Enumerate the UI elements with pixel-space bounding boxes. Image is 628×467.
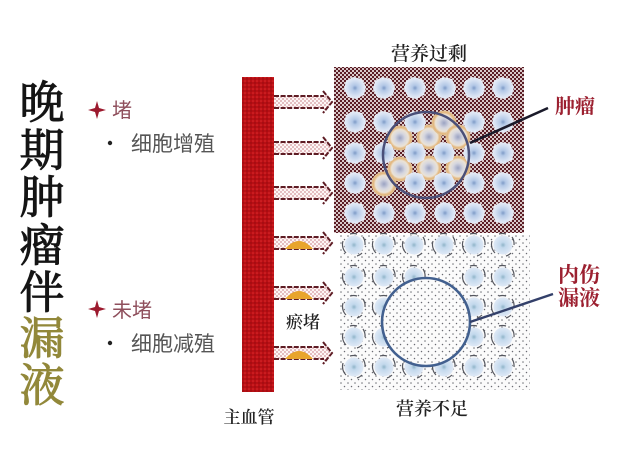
title highlighted part: 漏液: 液 <box>19 361 65 411</box>
title highlighted part: 漏液 <box>19 314 65 411</box>
panel: insufficient nutrition tissue <box>340 233 530 390</box>
callout label: 内伤漏液: 内伤 <box>558 263 600 287</box>
title highlighted part: 漏液: 漏 <box>19 314 65 364</box>
title dark part: 期 <box>19 126 65 176</box>
title dark part: 晚 <box>19 78 65 128</box>
callout label: 内伤漏液: 漏液 <box>558 286 600 310</box>
tumour boundary circle <box>383 112 469 198</box>
label: 营养不足: 营养不足 <box>396 399 468 419</box>
normal cells <box>344 77 514 224</box>
label: 主血管: 主血管 <box>224 408 274 427</box>
callout line: internal injury leakage <box>470 294 553 322</box>
arrows from vessel to tissue <box>274 91 332 364</box>
bullet group: 未堵 <box>88 299 215 356</box>
heading: 未堵: 未堵 <box>112 299 152 322</box>
blockages in arrows <box>285 241 313 359</box>
sub bullet: 细胞减殖: 细胞减殖 <box>131 333 215 356</box>
tumour cells with orange rim <box>372 110 470 196</box>
title dark part: 肿 <box>19 173 65 223</box>
callout line: tumour <box>470 108 548 143</box>
label: 营养过剩: 营养过剩 <box>391 43 467 65</box>
sub bullet: 细胞增殖: 细胞增殖 <box>131 133 215 156</box>
sparse cells <box>342 233 514 378</box>
heading: 堵: 堵 <box>112 99 132 122</box>
icon: star bullet <box>88 101 106 119</box>
title: 晚期肿瘤伴漏液 <box>19 78 65 411</box>
icon: star bullet <box>88 300 106 318</box>
label: 瘀堵: 瘀堵 <box>286 313 320 332</box>
main blood vessel <box>242 77 274 392</box>
bullet group: 堵 <box>88 99 215 156</box>
title dark part: 瘤 <box>19 221 65 271</box>
leakage circle <box>382 278 470 366</box>
callout label: 肿瘤: 肿瘤 <box>555 94 595 118</box>
panel: excess nutrition tissue <box>334 67 524 233</box>
title dark part <box>19 78 65 318</box>
title dark part: 伴 <box>19 268 65 318</box>
callout label: 内伤漏液 <box>558 263 600 310</box>
